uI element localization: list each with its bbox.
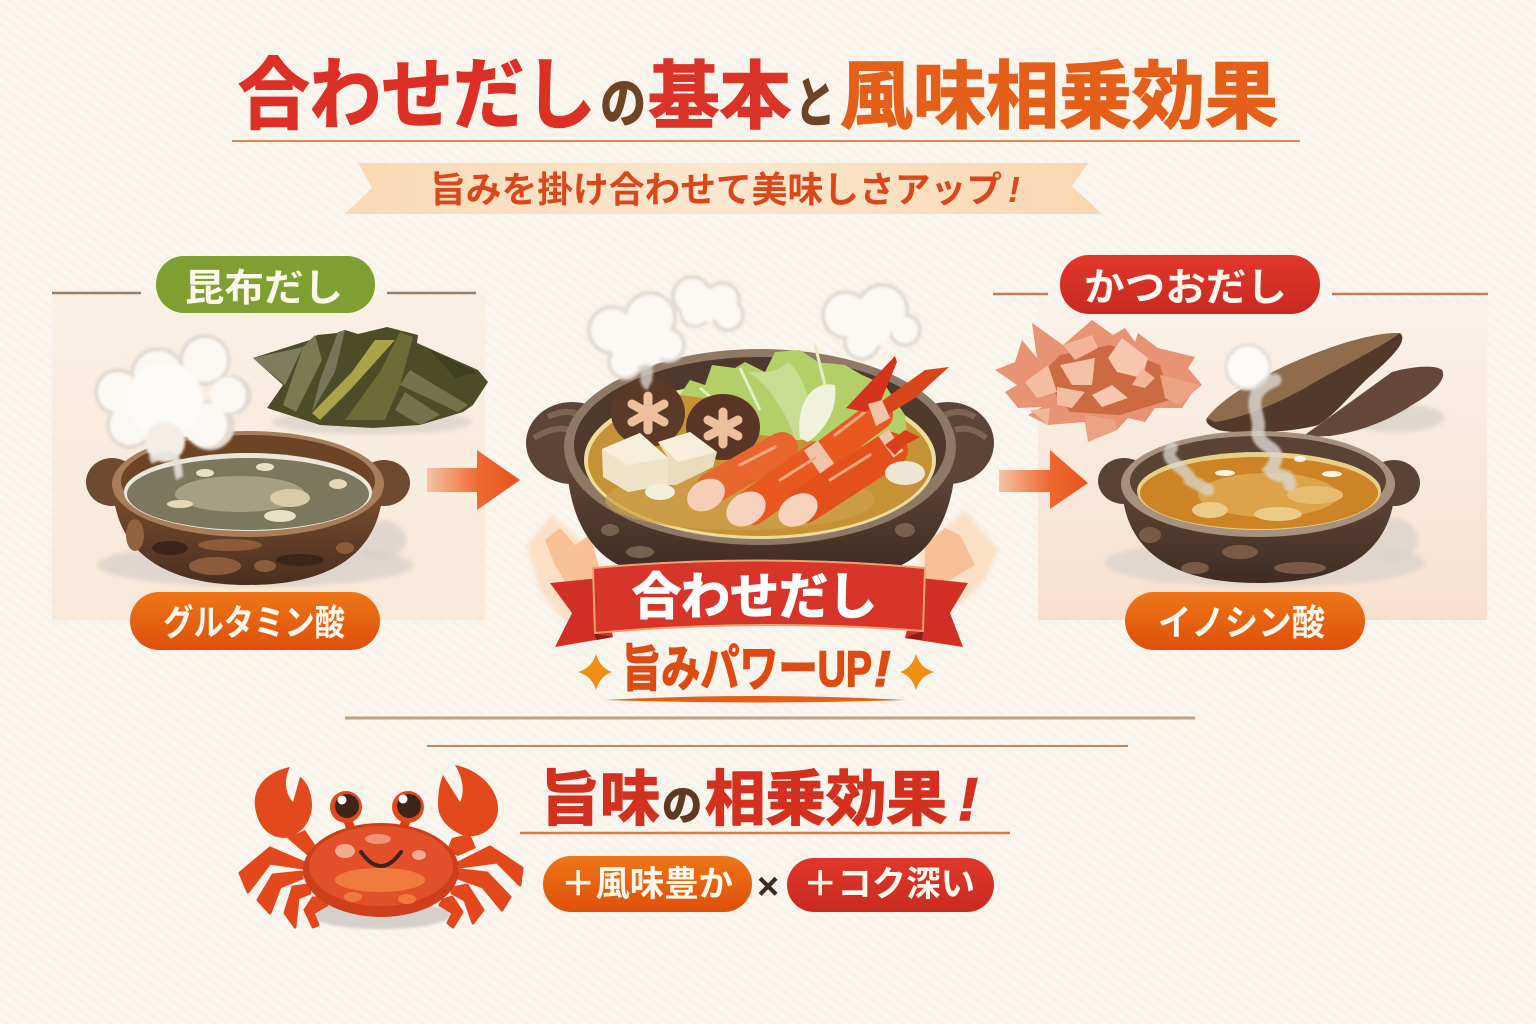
label: glutamic acid	[130, 592, 380, 650]
crab body	[303, 823, 459, 917]
ribbon tail right	[905, 578, 968, 647]
steam: hot pot	[587, 275, 922, 385]
pill: deeper body: ＋コク深い	[803, 865, 975, 904]
steam: katsuo pot	[1169, 345, 1290, 490]
label: katsuo dashi	[1060, 255, 1320, 314]
subtitle banner: !	[1008, 169, 1020, 210]
icon: sparkle right	[900, 654, 934, 690]
icon: shiitake	[611, 379, 760, 460]
heading: umami synergy: 旨味	[540, 766, 660, 833]
pill: richer flavor: ＋風味豊か	[561, 865, 733, 904]
heading: umami synergy	[540, 766, 978, 833]
label: kombu dashi: 昆布だし	[185, 268, 343, 310]
icon: hot pot	[526, 349, 994, 572]
label: inosinic acid	[1125, 592, 1365, 650]
crab claws	[255, 765, 498, 856]
steam: kombu pot	[94, 334, 252, 478]
label: inosinic acid: イノシン酸	[1158, 602, 1325, 643]
icon: tofu	[602, 432, 717, 492]
ribbon body	[593, 560, 925, 633]
panel background left	[52, 295, 485, 620]
pill: richer flavor	[543, 856, 752, 912]
icon: sparkle left	[578, 654, 612, 690]
label: kombu dashi	[156, 256, 375, 313]
icon: kombu pot	[86, 431, 413, 587]
title: 風味相乗効果	[840, 55, 1278, 138]
icon: katsuo pot	[1098, 431, 1425, 587]
panel: kombu dashi	[52, 256, 488, 620]
icon: lettuce	[680, 345, 908, 448]
icon: katsuobushi blocks	[1206, 333, 1445, 437]
heading: umami synergy: !	[958, 766, 978, 833]
umami power up text: !	[874, 641, 891, 697]
arrow: blend to katsuo	[999, 450, 1088, 509]
panel: blended dashi hot pot	[526, 275, 998, 702]
label: glutamic acid: グルタミン酸	[163, 602, 345, 643]
crab eyes	[330, 791, 424, 832]
icon: crab legs	[645, 356, 949, 534]
ribbon	[550, 560, 968, 647]
ribbon tail left	[550, 578, 613, 647]
panel: katsuo dashi	[993, 255, 1488, 620]
icon: bonito flakes	[995, 320, 1202, 442]
panel background right	[1038, 302, 1487, 620]
icon: dried kombu	[253, 327, 488, 435]
multiply sign: ×	[757, 866, 779, 908]
title: の	[600, 74, 646, 134]
subtitle banner: 旨みを掛け合わせて美味しさアップ	[430, 169, 1002, 210]
title underline	[232, 140, 1300, 142]
title: と	[795, 74, 835, 134]
subtitle banner	[345, 163, 1102, 214]
heading: umami synergy: の	[662, 782, 702, 829]
title: 基本	[648, 55, 791, 138]
crab legs	[240, 847, 522, 927]
arrow: kombu to blend	[427, 450, 520, 510]
pill: deeper body	[787, 858, 994, 912]
title: 合わせだし	[238, 51, 596, 139]
heading: umami synergy: 相乗効果	[705, 766, 947, 833]
title	[238, 51, 1278, 139]
umami power up text: 旨みパワーUP	[622, 641, 872, 697]
brush accents	[527, 510, 998, 622]
icon: crab mascot	[240, 765, 522, 929]
ribbon: 合わせだし	[632, 569, 877, 625]
label: katsuo dashi: かつおだし	[1084, 267, 1287, 310]
